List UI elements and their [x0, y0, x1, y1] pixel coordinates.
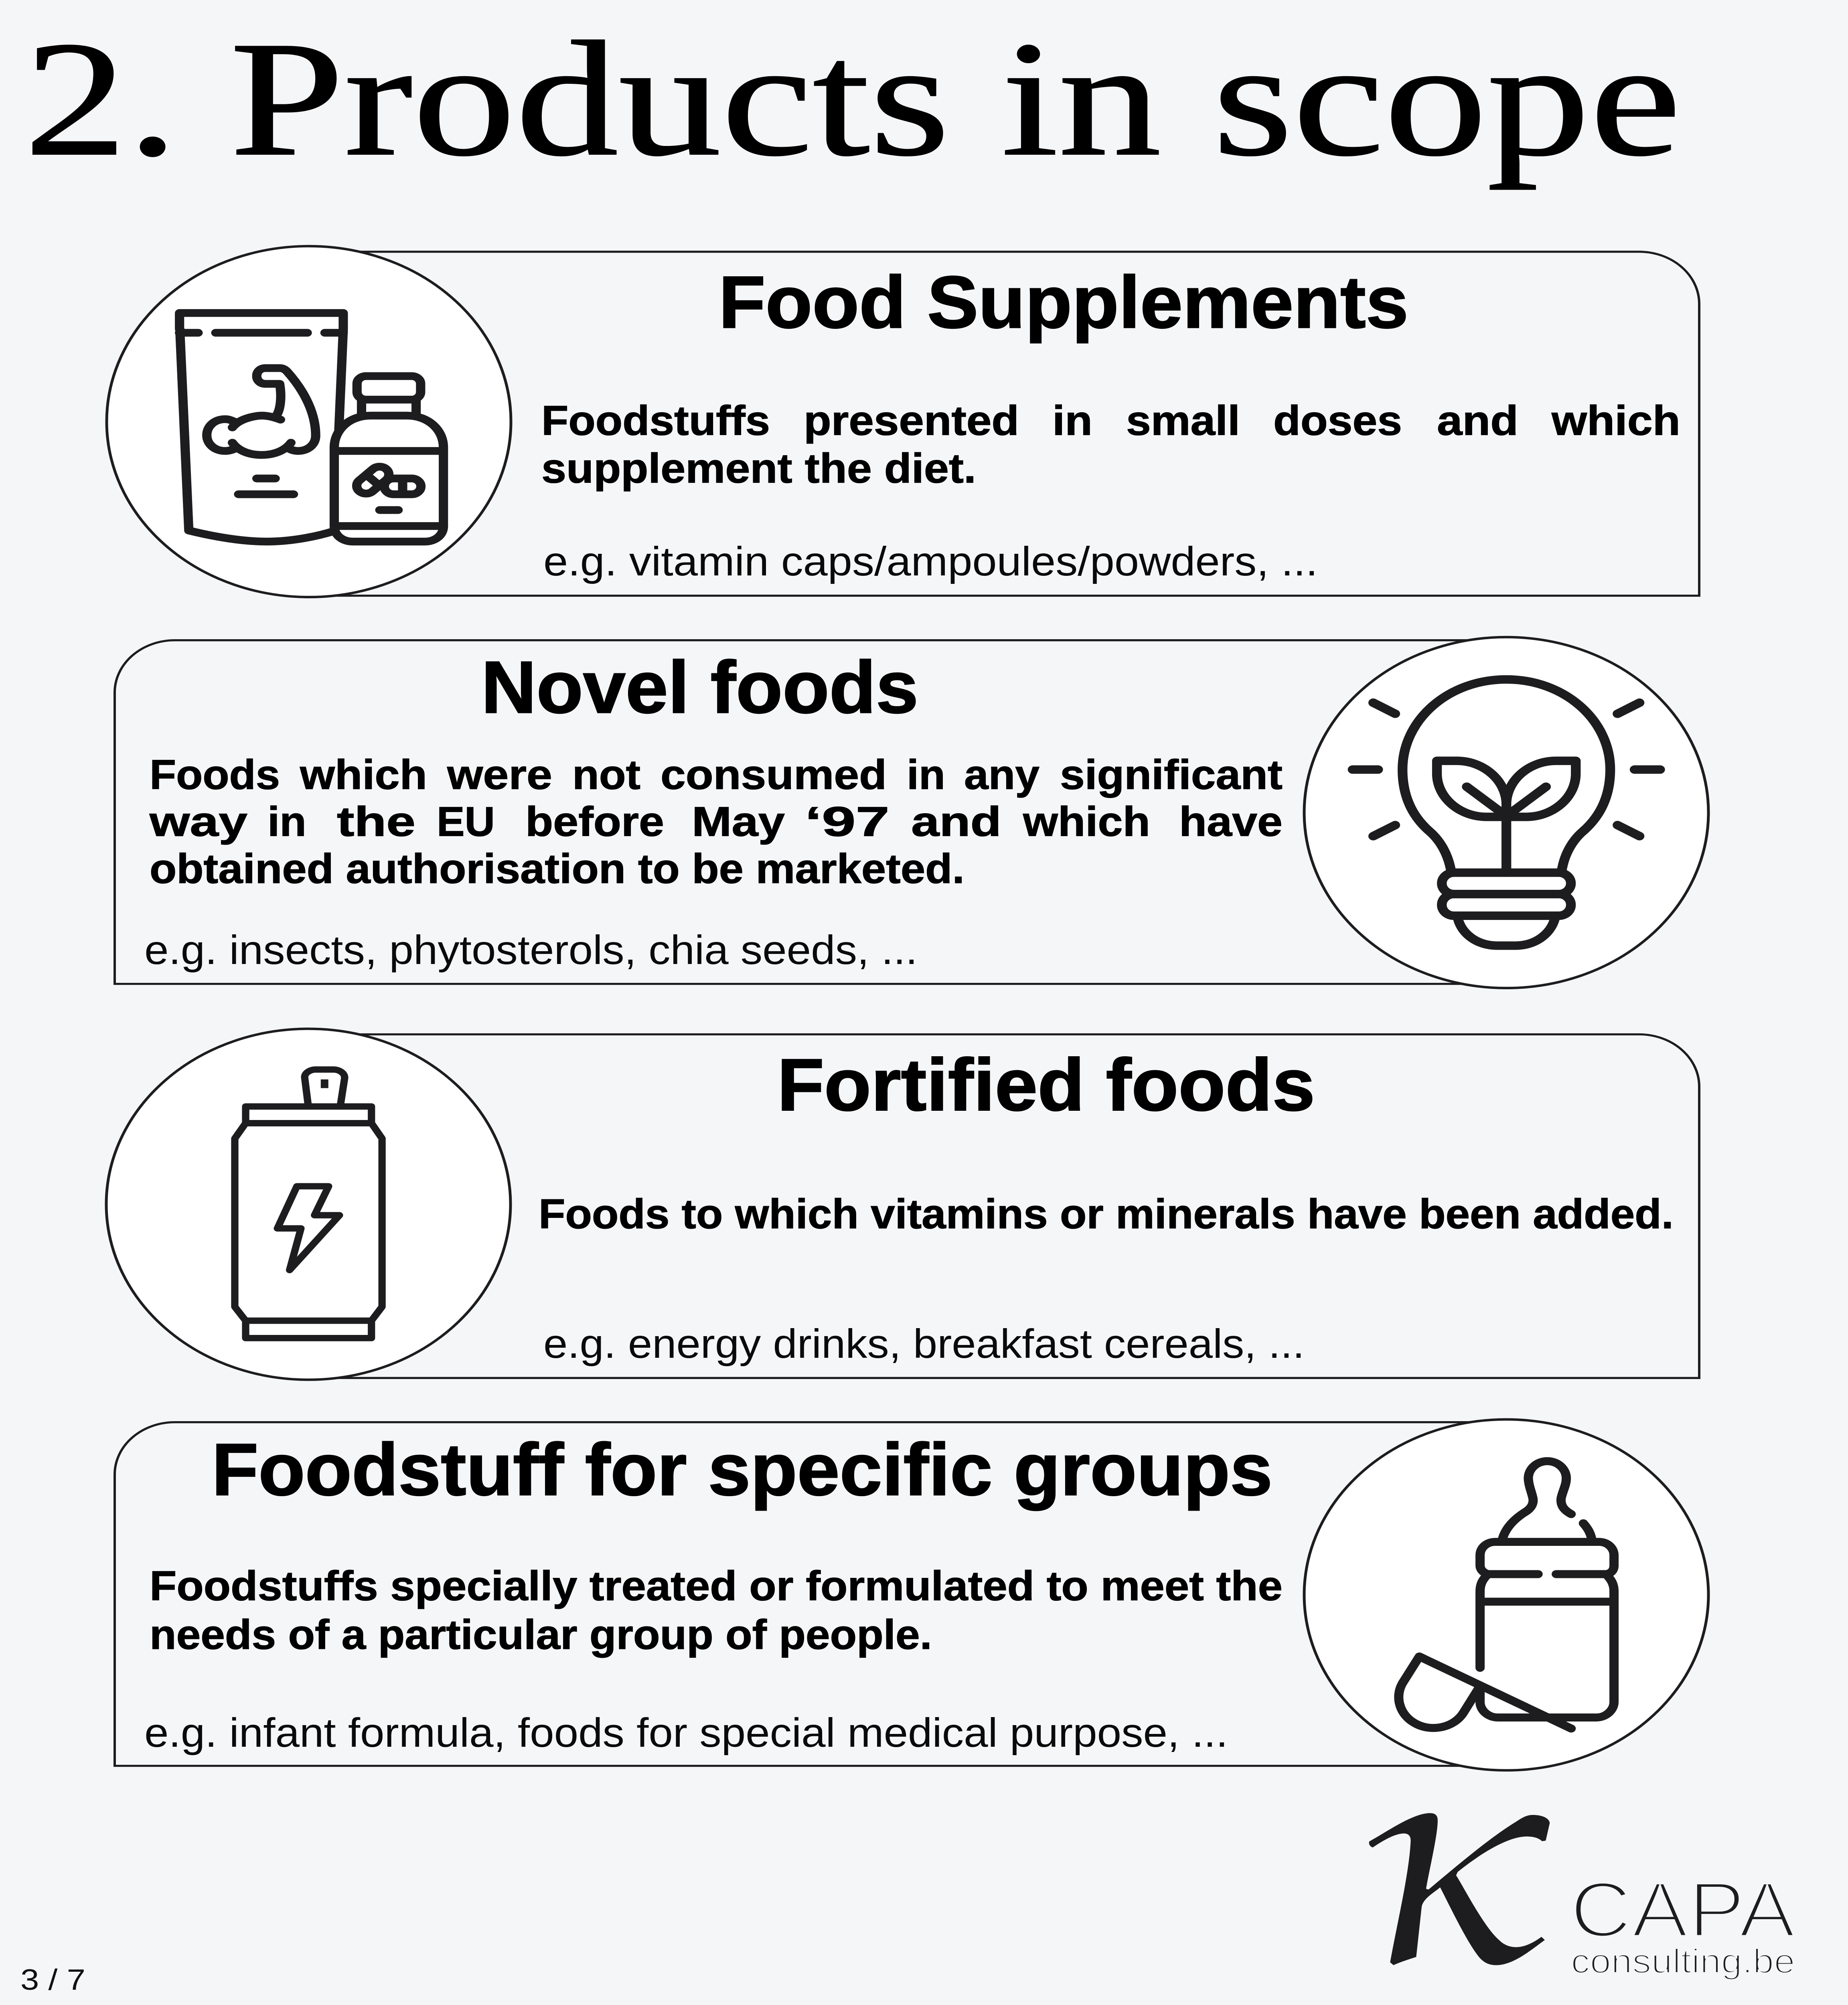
logo wordmark: consulting.be: consulting.be — [1571, 1942, 1795, 1981]
description: novel foods: significant — [1060, 751, 1283, 798]
description: food supplements: small — [1126, 397, 1240, 444]
description: novel foods: May — [692, 798, 785, 845]
description: food supplements: presented — [804, 397, 1019, 444]
panel frame: foodstuff for specific groups — [115, 1422, 1506, 1766]
description: novel foods: before — [525, 798, 664, 845]
panel: food supplements — [107, 246, 1699, 597]
description: food supplements: supplement the diet. — [541, 445, 976, 492]
description: novel foods: not — [572, 751, 640, 798]
description: novel foods: Foods — [150, 751, 280, 798]
description: food supplements — [541, 397, 1680, 492]
title: 2. Products in scope — [24, 7, 1681, 190]
examples: food supplements: e.g. vitamin caps/ampoules/powders, ... — [543, 539, 1318, 584]
description: novel foods: obtained authorisation to be marketed. — [150, 845, 965, 892]
heading: foodstuff for specific groups: Foodstuff for specific groups — [212, 1428, 1273, 1511]
heading: food supplements: Food Supplements — [719, 261, 1408, 344]
panel frame: novel foods — [115, 640, 1506, 984]
panel: foodstuff for specific groups — [115, 1420, 1708, 1770]
icon: energy drink can — [235, 1069, 382, 1338]
description: novel foods: any — [964, 751, 1040, 798]
icon: light bulb with sprout — [1353, 679, 1660, 946]
heading: novel foods: Novel foods — [481, 646, 918, 729]
circle: fortified foods — [106, 1029, 511, 1380]
description: food supplements: doses — [1273, 397, 1402, 444]
description: novel foods: the — [337, 798, 415, 845]
panel: novel foods — [115, 637, 1708, 988]
icon: baby bottle and scoop — [1399, 1461, 1614, 1729]
examples: novel foods: e.g. insects, phytosterols, chia seeds, ... — [144, 927, 918, 973]
description: fortified foods: Foods to which vitamins or minerals have been added. — [539, 1190, 1674, 1237]
circle: novel foods — [1304, 637, 1708, 988]
description: novel foods: which — [1023, 798, 1150, 845]
logo wordmark: CAPA: CAPA — [1570, 1865, 1795, 1954]
examples: fortified foods: e.g. energy drinks, breakfast cereals, ... — [543, 1321, 1305, 1367]
panel frame: food supplements — [309, 252, 1699, 596]
icon: supplement pouch and pill bottle — [180, 313, 444, 542]
description: food supplements: in — [1052, 397, 1092, 444]
logo mark: K — [1369, 1813, 1550, 1965]
description: food supplements: which — [1551, 397, 1680, 444]
description: novel foods: way — [149, 798, 247, 845]
description: foodstuff for specific groups — [150, 1562, 1283, 1658]
panel: fortified foods — [106, 1029, 1699, 1380]
description: novel foods: consumed — [661, 751, 887, 798]
description: novel foods: ‘97 — [805, 798, 890, 845]
description: foodstuff for specific groups: needs of a particular group of people. — [150, 1611, 932, 1658]
description: novel foods: EU — [437, 798, 495, 845]
description: food supplements: Foodstuffs — [541, 397, 770, 444]
panel frame: fortified foods — [309, 1034, 1699, 1378]
description: novel foods: were — [447, 751, 552, 798]
description: novel foods: which — [300, 751, 427, 798]
description: novel foods: and — [911, 798, 1001, 845]
page number: 3 / 7 — [20, 1963, 85, 1996]
description: novel foods — [149, 751, 1283, 892]
circle: food supplements — [107, 246, 511, 597]
description: novel foods: in — [267, 798, 306, 845]
description: novel foods: in — [907, 751, 945, 798]
logo: K CAPA consulting.be — [1369, 1813, 1795, 1981]
circle: foodstuff for specific groups — [1304, 1420, 1708, 1770]
description: food supplements: and — [1437, 397, 1518, 444]
examples: foodstuff for specific groups: e.g. infant formula, foods for special medical purpose, ... — [144, 1710, 1228, 1756]
heading: fortified foods: Fortified foods — [777, 1044, 1315, 1126]
description: foodstuff for specific groups: Foodstuffs specially treated or formulated to meet the — [150, 1562, 1283, 1609]
description: novel foods: have — [1179, 798, 1283, 845]
